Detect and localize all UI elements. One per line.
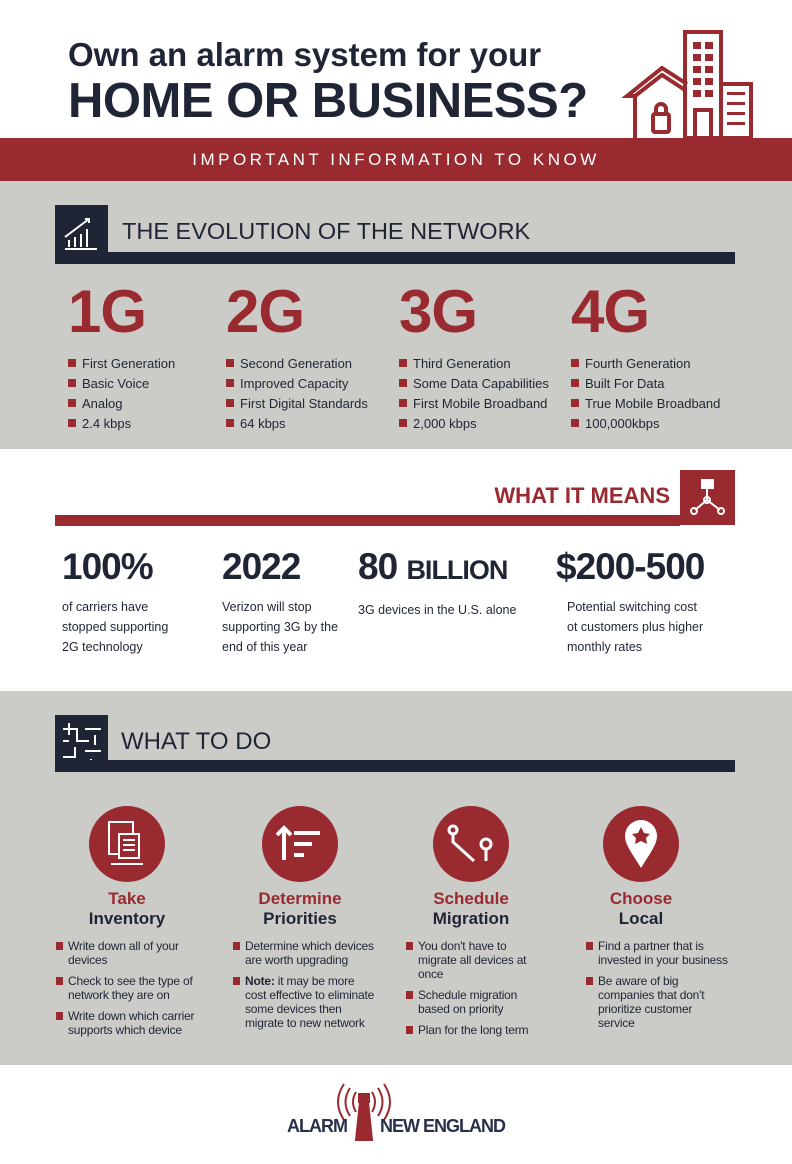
- 3G: First Mobile Broadband: [413, 396, 547, 411]
- stat 2022: Verizon will stop: [222, 600, 312, 614]
- 2G: Improved Capacity: [240, 376, 348, 391]
- heading: WHAT TO DO: [121, 728, 271, 755]
- title: Own an alarm system for your: [68, 36, 541, 73]
- 2G: 64 kbps: [240, 416, 286, 431]
- step: local: Local: [619, 909, 663, 928]
- step: local: Choose: [610, 889, 672, 908]
- heading: THE EVOLUTION OF THE NETWORK: [122, 218, 530, 244]
- step: priorities: Determine which devices are worth upgrading: [245, 939, 374, 967]
- step: migration: Schedule: [433, 889, 509, 908]
- icon: network: [680, 470, 735, 525]
- 1G: Basic Voice: [82, 376, 149, 391]
- stat 100%: stopped supporting: [62, 620, 168, 634]
- stat 2022: 2022: [222, 546, 300, 587]
- step: local: Find a partner that is invested in your business: [598, 939, 728, 967]
- stat cost: [556, 546, 704, 654]
- icon: house and building: [621, 30, 753, 138]
- 3G: [399, 278, 549, 431]
- stat 80 billion: [358, 546, 516, 617]
- 4G: 100,000kbps: [585, 416, 659, 431]
- step: priorities: Note: it may be more cost effective to eliminate some devices then migrate to new network: [245, 974, 374, 1030]
- 3G: 3G: [399, 278, 477, 345]
- heading: what it means: WHAT IT MEANS: [494, 483, 670, 508]
- step: local: Be aware of big companies that don't prioritize customer service: [598, 974, 704, 1030]
- stat 2022: end of this year: [222, 640, 307, 654]
- stat 80 billion: 80 BILLION: [358, 546, 507, 587]
- title: [68, 36, 588, 128]
- 2G: Second Generation: [240, 356, 352, 371]
- logo: ALARM: [287, 1116, 347, 1136]
- stat 100%: of carriers have: [62, 600, 148, 614]
- stat 100%: 100%: [62, 546, 153, 587]
- stat cost: ot customers plus higher: [567, 620, 703, 634]
- panel: what to do: [0, 691, 792, 1065]
- stat 2022: supporting 3G by the: [222, 620, 338, 634]
- title: HOME OR BUSINESS?: [68, 74, 588, 128]
- stat cost: Potential switching cost: [567, 600, 697, 614]
- icon: arrows: [55, 715, 108, 772]
- 4G: 4G: [571, 278, 649, 345]
- 3G: 2,000 kbps: [413, 416, 477, 431]
- 4G: Built For Data: [585, 376, 664, 391]
- step: inventory: Take: [108, 889, 146, 908]
- banner: IMPORTANT INFORMATION TO KNOW: [192, 150, 600, 169]
- logo: [287, 1084, 506, 1141]
- 4G: [571, 278, 720, 431]
- 1G: Analog: [82, 396, 122, 411]
- step: inventory: Write down which carrier supports which device: [68, 1009, 194, 1037]
- panel: evolution: [0, 181, 792, 449]
- stat 100%: [62, 546, 168, 654]
- step: priorities: Determine: [258, 889, 342, 908]
- step: migration: Migration: [433, 909, 509, 928]
- stat cost: $200-500: [556, 546, 704, 587]
- step: inventory: Inventory: [89, 909, 165, 928]
- 1G: 2.4 kbps: [82, 416, 131, 431]
- step: migration: [406, 806, 528, 1037]
- 4G: True Mobile Broadband: [585, 396, 720, 411]
- stat 100%: 2G technology: [62, 640, 143, 654]
- step: migration: You don't have to migrate all devices at once: [418, 939, 526, 981]
- stat cost: monthly rates: [567, 640, 642, 654]
- 1G: [68, 278, 175, 431]
- logo: NEW ENGLAND: [380, 1116, 505, 1136]
- 3G: Some Data Capabilities: [413, 376, 549, 391]
- 4G: Fourth Generation: [585, 356, 691, 371]
- stat 80 billion: 3G devices in the U.S. alone: [358, 603, 516, 617]
- step: inventory: Check to see the type of network they are on: [68, 974, 193, 1002]
- step: priorities: Priorities: [263, 909, 337, 928]
- step: inventory: Write down all of your devices: [68, 939, 179, 967]
- step: priorities: [233, 806, 374, 1030]
- 1G: First Generation: [82, 356, 175, 371]
- 2G: First Digital Standards: [240, 396, 368, 411]
- 1G: 1G: [68, 278, 146, 345]
- step: migration: Plan for the long term: [418, 1023, 528, 1037]
- banner: [0, 138, 792, 181]
- step: inventory: [56, 806, 194, 1037]
- icon: chart: [55, 205, 108, 263]
- stat 2022: [222, 546, 338, 654]
- 2G: [226, 278, 368, 431]
- 3G: Third Generation: [413, 356, 511, 371]
- 2G: 2G: [226, 278, 304, 345]
- step: migration: Schedule migration based on priority: [418, 988, 517, 1016]
- step: local: [586, 806, 728, 1030]
